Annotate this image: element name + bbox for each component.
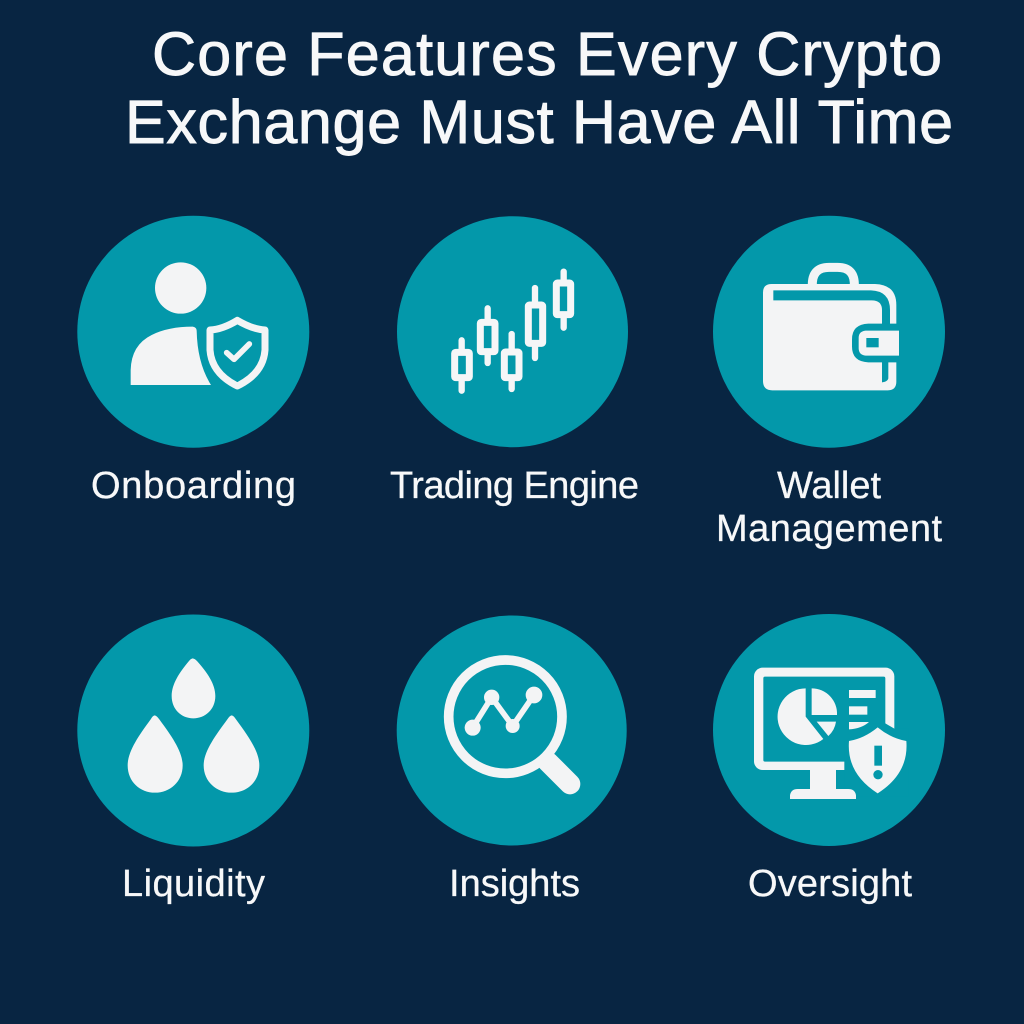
- panel: liquidity: [77, 614, 309, 905]
- icon circle: oversight: [713, 614, 945, 846]
- panel: trading engine: [390, 216, 639, 507]
- label: wallet management: [716, 465, 942, 550]
- icon circle: wallet management: [713, 216, 945, 448]
- label: trading engine: Trading Engine: [390, 465, 639, 507]
- icon circle: onboarding: [77, 216, 309, 448]
- icon: monitor with pie chart and alert shield: [754, 668, 909, 799]
- icon: user with shield check: [131, 262, 265, 386]
- label: onboarding: Onboarding: [91, 465, 296, 507]
- icon: candlestick chart: [455, 272, 571, 391]
- icon circle: trading engine: [397, 216, 628, 447]
- label: wallet management: Wallet: [777, 465, 881, 507]
- icon: three drops: [128, 658, 259, 793]
- label: wallet management: Management: [716, 508, 942, 550]
- label: oversight: Oversight: [748, 863, 912, 905]
- panel: insights: [397, 616, 627, 905]
- panel: oversight: [713, 614, 945, 905]
- panel: wallet management: [713, 216, 945, 550]
- label: insights: Insights: [449, 863, 580, 905]
- title: [125, 20, 953, 156]
- title: Core Features Every Crypto: [152, 20, 942, 88]
- panel: onboarding: [77, 216, 309, 507]
- icon circle: liquidity: [77, 614, 309, 846]
- title: Exchange Must Have All Time: [125, 88, 953, 156]
- icon circle: insights: [397, 616, 627, 846]
- icon: magnifier with line chart: [449, 660, 570, 784]
- icon: wallet: [763, 267, 899, 390]
- label: liquidity: Liquidity: [122, 863, 265, 905]
